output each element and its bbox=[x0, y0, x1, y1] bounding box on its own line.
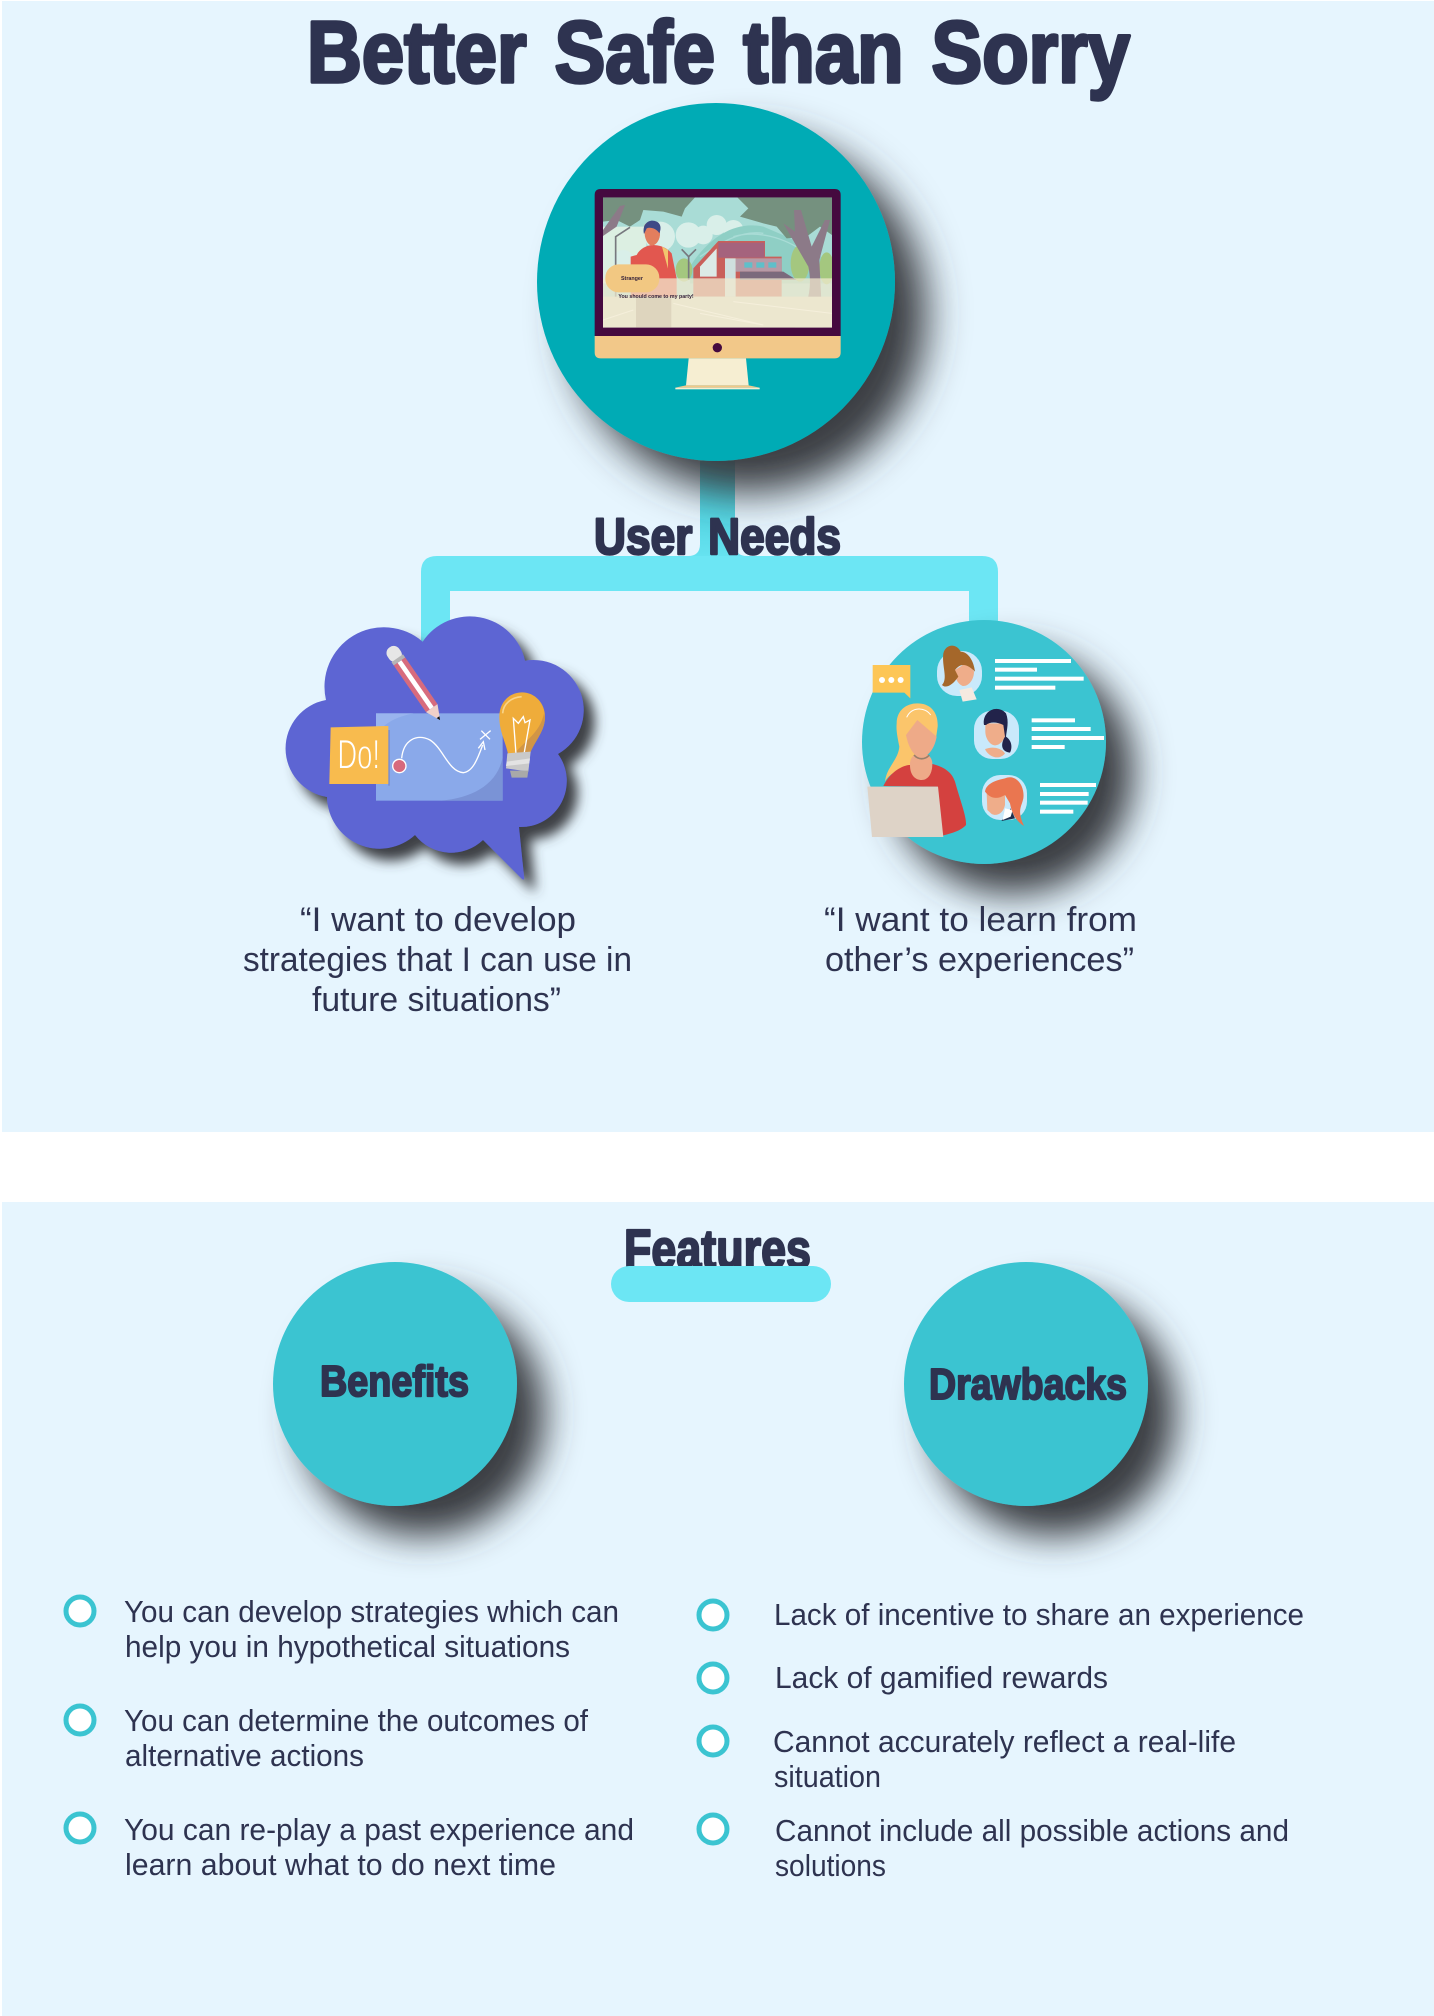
quote: strategies: future situations” bbox=[312, 981, 561, 1019]
icon: strategy thought bubble bbox=[286, 616, 584, 880]
avatar 1 bbox=[937, 646, 982, 702]
benefit 1 text: You can develop strategies which can bbox=[124, 1594, 619, 1629]
light bulb bbox=[499, 692, 545, 755]
benefit 1 text bbox=[124, 1594, 619, 1664]
panel: user needs background bbox=[2, 1, 1434, 1132]
drawback 3 text: Cannot accurately reflect a real-life bbox=[773, 1724, 1236, 1759]
drawback 4 text: Cannot include all possible actions and bbox=[775, 1813, 1289, 1848]
drawback 4 text bbox=[775, 1813, 1289, 1883]
quote: learning from others: “I want to learn from bbox=[824, 901, 1137, 939]
title: Better Safe than Sorry bbox=[307, 4, 1130, 101]
speech bubble bbox=[873, 665, 910, 698]
quote: strategies bbox=[243, 901, 632, 1019]
game screenshot bbox=[603, 197, 834, 328]
bullet: drawback 3 bbox=[699, 1727, 727, 1755]
drawback 3 text: situation bbox=[774, 1759, 881, 1794]
dialogue text: Stranger bbox=[621, 276, 644, 282]
teal circle bbox=[862, 620, 1106, 864]
circle: benefits: Benefits bbox=[320, 1357, 469, 1406]
avatar 2 bbox=[974, 709, 1019, 759]
drawback 4 text: solutions bbox=[775, 1848, 886, 1883]
people illustration bbox=[867, 646, 1104, 837]
monitor illustration bbox=[595, 189, 841, 389]
drawback 3 text bbox=[773, 1724, 1236, 1794]
drawback 1 text: Lack of incentive to share an experience bbox=[774, 1597, 1304, 1632]
icon: people sharing experiences bbox=[862, 620, 1106, 864]
connector stem bbox=[688, 461, 747, 556]
teal circle bbox=[537, 103, 895, 461]
connector bracket bbox=[421, 556, 998, 650]
icon: computer monitor in teal circle bbox=[537, 103, 895, 461]
avatar 3 bbox=[982, 775, 1027, 826]
circle: drawbacks: Drawbacks bbox=[929, 1360, 1127, 1409]
cloud bubble bbox=[286, 616, 584, 880]
drawback 2 text: Lack of gamified rewards bbox=[775, 1660, 1108, 1695]
main woman bbox=[885, 703, 938, 782]
circle: benefits bbox=[273, 1262, 517, 1506]
quote: learning from others: other’s experiences” bbox=[825, 941, 1134, 979]
circle: drawbacks bbox=[904, 1262, 1148, 1506]
text lines bbox=[995, 659, 1104, 814]
quote: strategies: strategies that I can use in bbox=[243, 941, 632, 979]
panel: features background bbox=[2, 1202, 1434, 2016]
bullet: drawback 4 bbox=[699, 1815, 727, 1843]
strategy illustration: Do! bbox=[337, 730, 380, 777]
strategy illustration bbox=[329, 643, 545, 801]
benefit 2 text: alternative actions bbox=[125, 1738, 364, 1773]
monitor illustration: You should come to my party! bbox=[618, 294, 694, 300]
pencil bbox=[384, 643, 446, 724]
benefit 3 text bbox=[124, 1812, 634, 1882]
quote: learning from others bbox=[824, 901, 1137, 979]
quote: strategies: “I want to develop bbox=[300, 901, 576, 939]
heading: features: Features bbox=[624, 1218, 811, 1280]
benefit list bbox=[66, 1594, 634, 1882]
drawback list bbox=[699, 1597, 1304, 1883]
heading: user needs: User Needs bbox=[594, 508, 841, 565]
bullet: benefit 2 bbox=[66, 1706, 94, 1734]
bullet: drawback 1 bbox=[699, 1601, 727, 1629]
bullet: benefit 1 bbox=[66, 1597, 94, 1625]
bullet: drawback 2 bbox=[699, 1664, 727, 1692]
benefit 3 text: You can re-play a past experience and bbox=[124, 1812, 634, 1847]
features underline pill bbox=[611, 1266, 831, 1302]
benefit 2 text bbox=[124, 1703, 588, 1773]
bullet: benefit 3 bbox=[66, 1814, 94, 1842]
name tag bbox=[605, 264, 659, 292]
benefit 3 text: learn about what to do next time bbox=[125, 1847, 556, 1882]
benefit 2 text: You can determine the outcomes of bbox=[124, 1703, 588, 1738]
benefit 1 text: help you in hypothetical situations bbox=[125, 1629, 570, 1664]
